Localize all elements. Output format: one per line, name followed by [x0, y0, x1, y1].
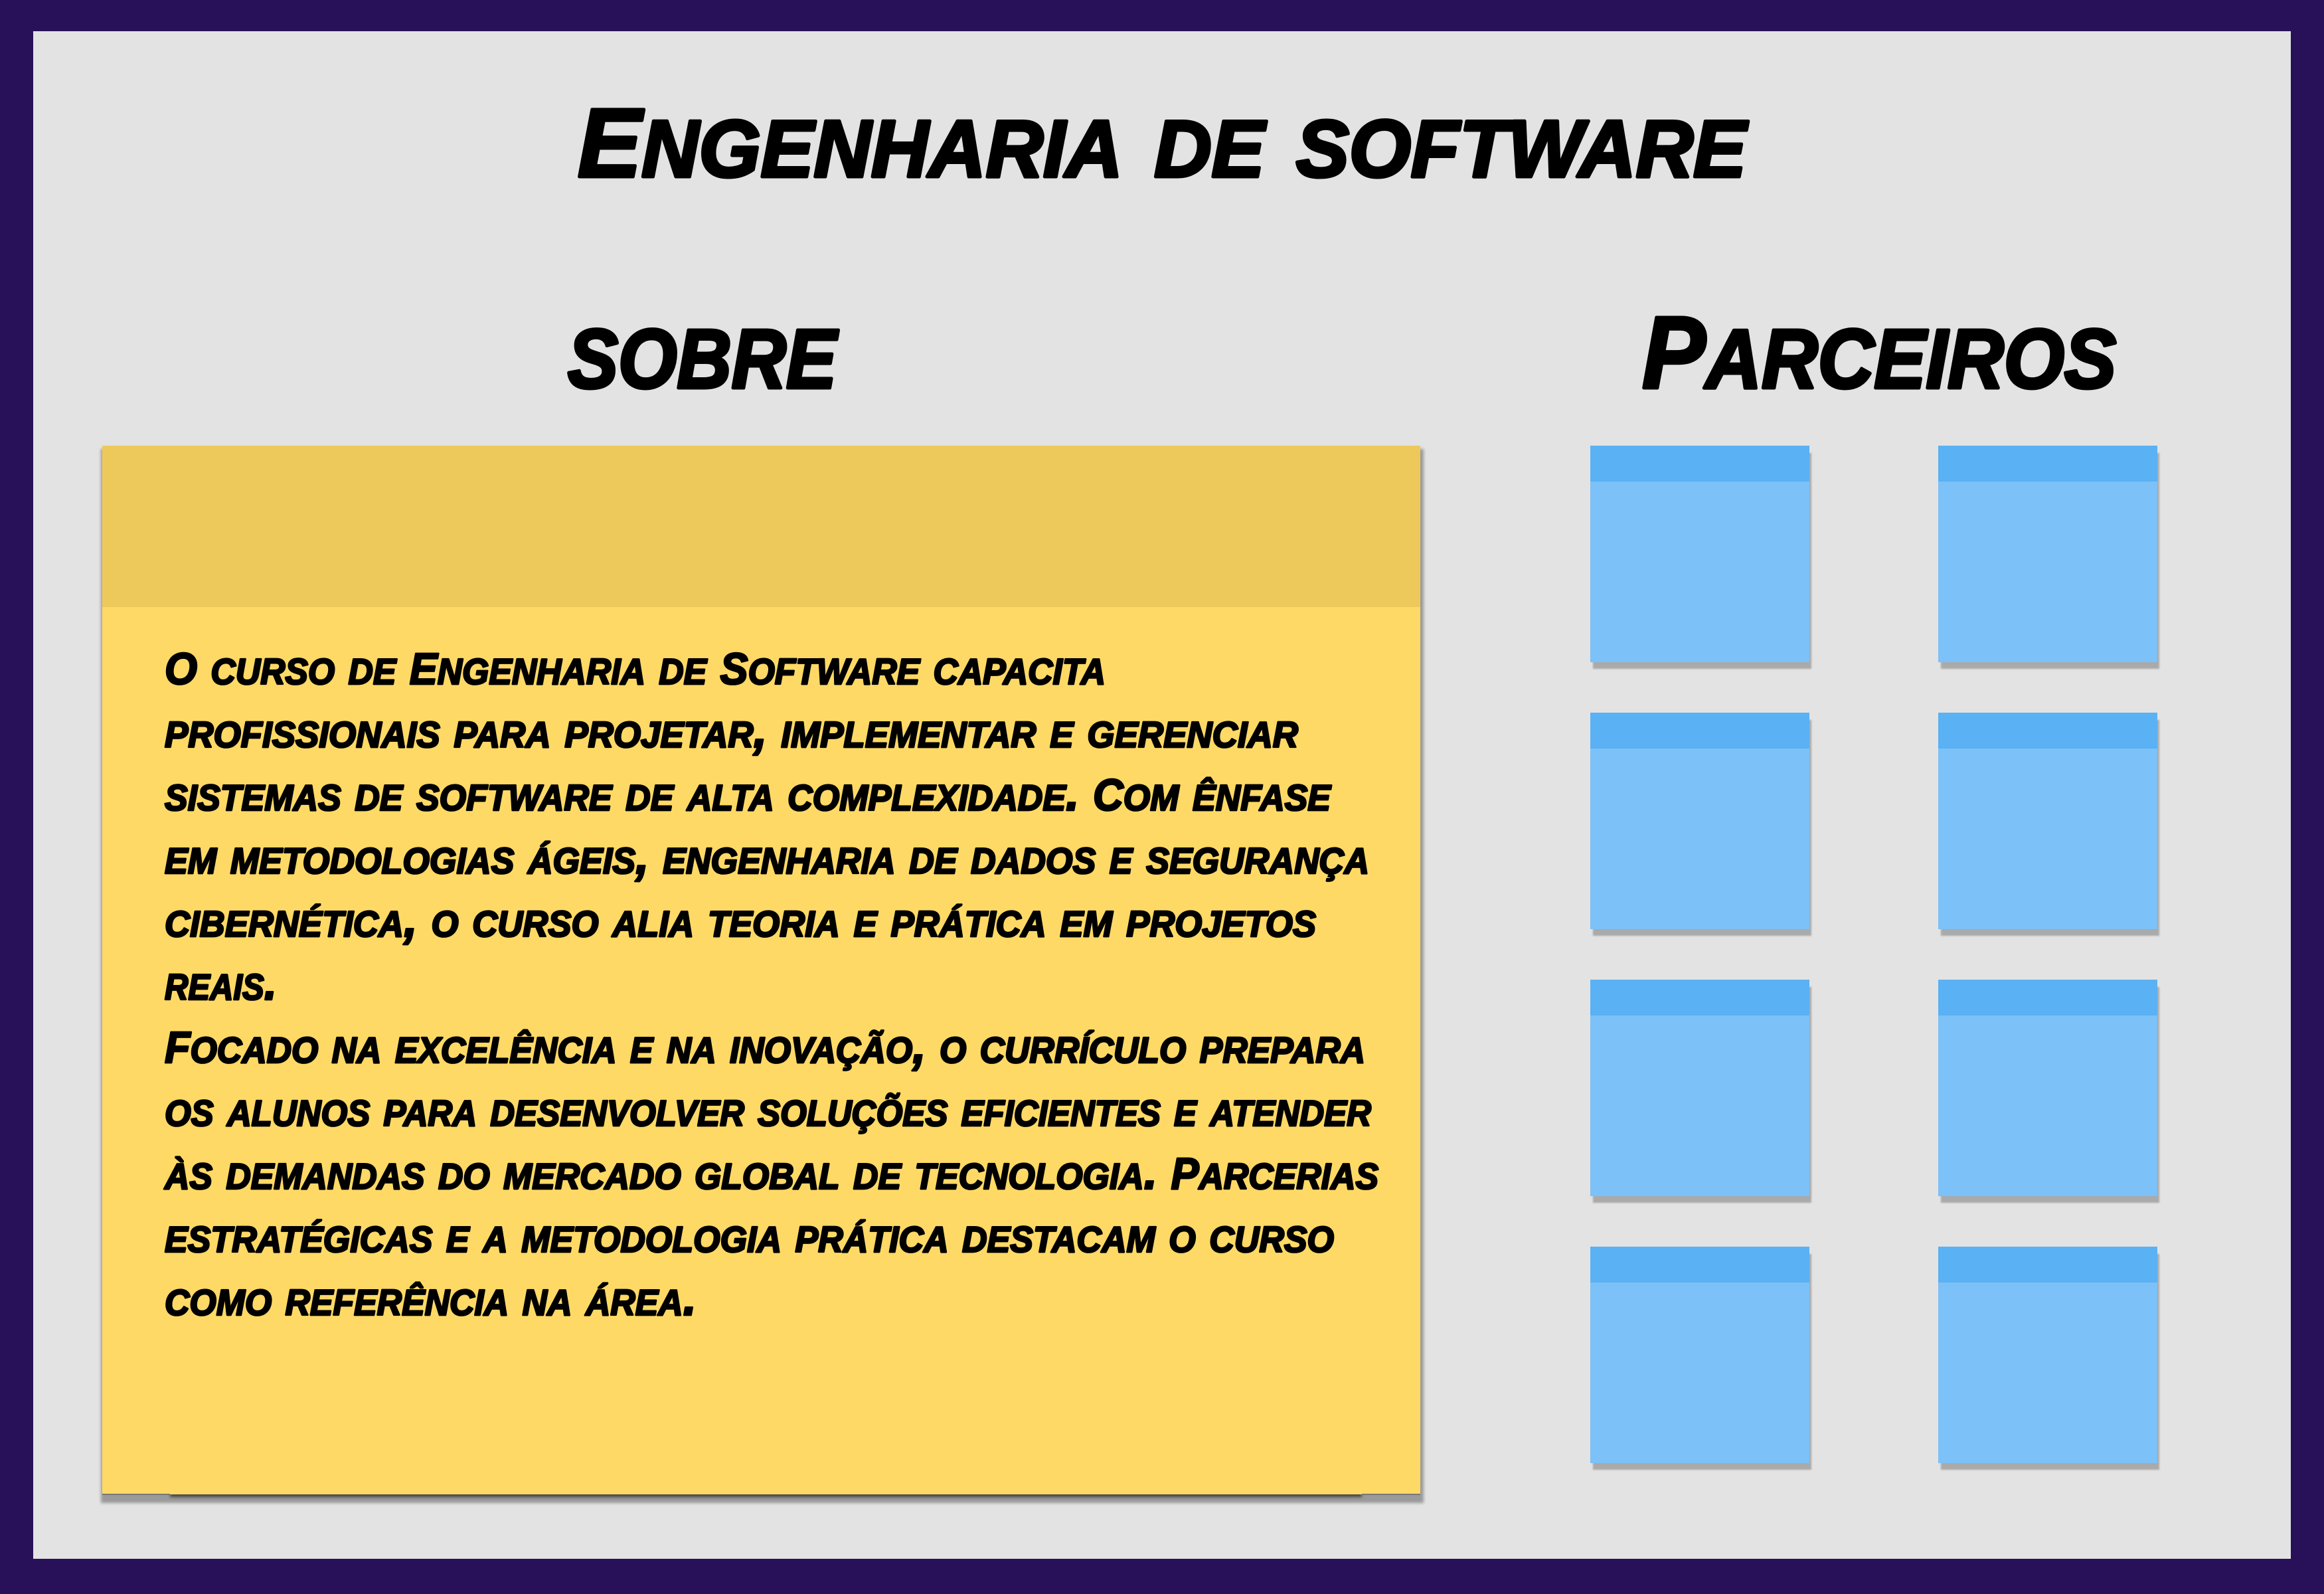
- partner note 3: [1590, 713, 1812, 936]
- panel: parceiros grid: [1590, 446, 2160, 1470]
- about text: sistemas de software de alta complexidade. Com ênfase: [165, 763, 1332, 822]
- about text: cibernética, o curso alia teoria e prática em projetos: [165, 889, 1316, 948]
- partner note 6: [1938, 980, 2160, 1203]
- partner note 1: [1590, 446, 1812, 669]
- about text: [163, 637, 1379, 1326]
- title: Engenharia de software: [578, 72, 1749, 201]
- about text: reais.: [165, 952, 277, 1011]
- panel: sobre sticky note: [100, 446, 1425, 1505]
- about text: O curso de Engenharia de Software capacita: [165, 637, 1106, 695]
- heading: parceiros: Parceiros: [1642, 280, 2116, 414]
- about text: os alunos para desenvolver soluções eficientes e atender: [165, 1079, 1371, 1137]
- partner note 7: [1590, 1247, 1812, 1470]
- partner note 4: [1938, 713, 2160, 936]
- about text: estratégicas e a metodologia prática destacam o curso: [165, 1205, 1334, 1263]
- about text: em metodologias ágeis, engenharia de dados e segurança: [165, 826, 1369, 885]
- about text: às demandas do mercado global de tecnologia. Parcerias: [163, 1142, 1378, 1200]
- partner note 8: [1938, 1247, 2160, 1470]
- about text: Focado na excelência e na inovação, o currículo prepara: [165, 1016, 1365, 1074]
- about text: profissionais para projetar, implementar e gerenciar: [165, 700, 1298, 758]
- partner note 5: [1590, 980, 1812, 1203]
- heading: sobre: sobre: [568, 280, 839, 414]
- about text: como referência na área.: [165, 1268, 697, 1326]
- partner note 2: [1938, 446, 2160, 669]
